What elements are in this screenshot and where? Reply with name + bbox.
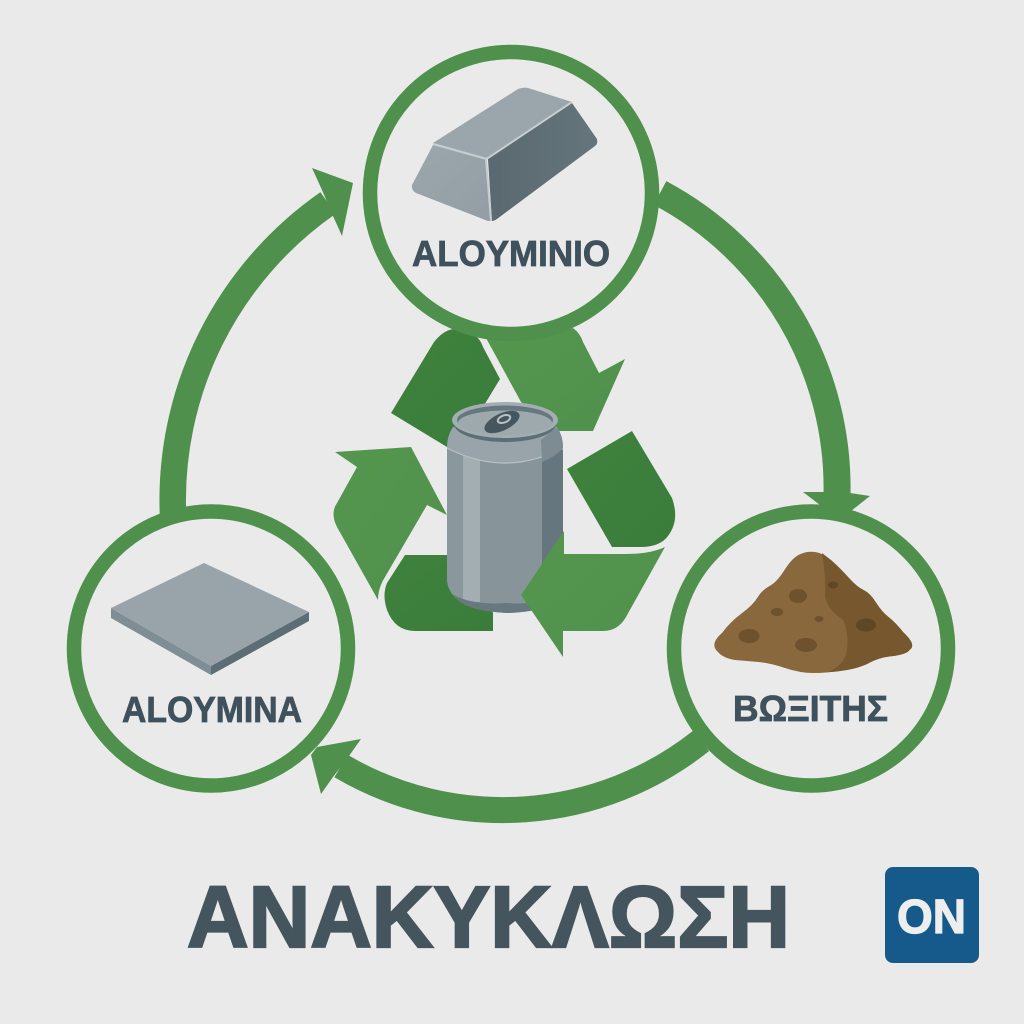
- icon: alumina slab: [111, 563, 309, 675]
- recycle arrow: left light: [334, 447, 447, 600]
- title: ΑΝΑΚΥΚΛΩΣΗ: [187, 869, 790, 966]
- label: aluminium: ALOYMINIO: [412, 233, 610, 274]
- recycle arrow: bottom-right light, in front of can: [521, 531, 665, 657]
- arrow: aluminium to bauxite: [660, 193, 870, 525]
- label: bauxite: BΩΞITHΣ: [733, 688, 888, 729]
- arrow: bauxite to alumina: [311, 739, 701, 810]
- recycle arrow: top light: [486, 328, 625, 431]
- logo badge: [885, 867, 979, 963]
- panel: aluminium circle: [370, 52, 652, 334]
- label: alumina: ALOYMINA: [122, 689, 302, 730]
- logo text: ON: [897, 891, 966, 944]
- panel: bauxite circle: [674, 512, 948, 786]
- icon: aluminium can: [446, 402, 565, 616]
- recycle segment: bottom-left dark: [384, 555, 493, 631]
- recycle segment: right dark: [567, 431, 675, 547]
- icon: aluminium ingot: [412, 88, 597, 221]
- recycling symbol: [334, 328, 675, 631]
- arrow: aluminium oxide to aluminium: [173, 168, 353, 515]
- recycle segment: top-left dark: [391, 329, 500, 447]
- icon: bauxite pile: [714, 552, 912, 673]
- panel: alumina circle: [74, 512, 348, 786]
